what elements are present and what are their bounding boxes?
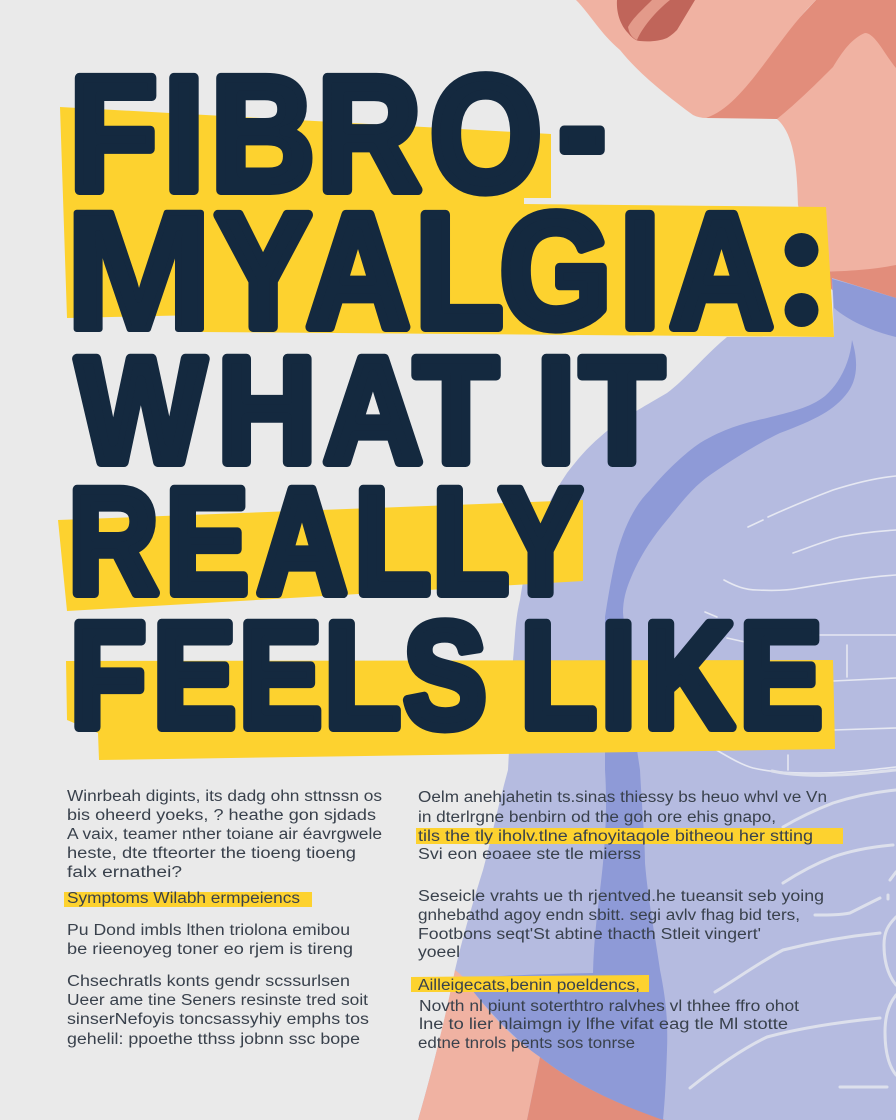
yellow highlight: FEELS LIKE [66, 660, 835, 760]
paragraph 2: yoeel [418, 944, 460, 961]
paragraph 1: Svi eon eoaee ste tle mierss [418, 846, 641, 863]
paragraph 2 [418, 888, 824, 961]
neck dark skin [706, 0, 896, 310]
highlight bar: right column line [416, 828, 843, 844]
paragraph 2: be rieenoyeg toner eo rjem is tireng [67, 941, 353, 958]
paragraph 3: Novth nl piunt soterthtro ralvhes vl thhee ffro ohot [419, 998, 800, 1015]
paragraph 2 [67, 922, 353, 958]
title line: FIBRO-: FIBRO- [70, 35, 606, 225]
paragraph 1 [418, 789, 827, 863]
subheading: Ailleigecats,benin poeldencs, [418, 977, 640, 994]
subheading: Symptoms Wilabh ermpeiencs [67, 890, 300, 907]
yellow highlight: FIBRO- and MYALGIA [60, 107, 834, 337]
fabric fold lines upper [705, 476, 896, 773]
title line: MYALGIA: remainder: YALGIA: [215, 173, 825, 362]
title line: MYALGIA: initial: M [65, 176, 213, 365]
blue fold [468, 340, 856, 1120]
paragraph 1: Winrbeah digints, its dadg ohn sttnssn os [67, 788, 382, 805]
paragraph 2: Footbons seqt'St abtine thacth Stleit vingert' [418, 926, 761, 943]
yellow highlight: REALLY [58, 500, 583, 611]
paragraph 3: edtne tnrols pents sos tonrse [418, 1035, 635, 1052]
paragraph 2: gnhebathd agoy endn sbitt. segi avlv fhag bid ters, [418, 907, 800, 924]
paragraph 3 [418, 998, 800, 1052]
paragraph 3: sinserNefoyis toncsassyhiy emphs tos [67, 1011, 369, 1028]
paragraph 2: Pu Dond imbls lthen triolona emibou [67, 922, 350, 939]
paragraph 1: falx ernathei? [67, 864, 182, 881]
paragraph 1: Oelm anehjahetin ts.sinas thiessy bs heuo whvl ve Vn [418, 789, 827, 806]
illustration: person's neck and torso [418, 0, 896, 1120]
face [576, 0, 816, 118]
paragraph 3: Chsechratls konts gendr scssurlsen [67, 973, 350, 990]
fabric fold lines lower [690, 770, 896, 1088]
paragraph 1: in dterlrgne benbirn od the goh ore ehis gnapo, [418, 809, 776, 826]
paragraph 2: Seseicle vrahts ue th rjentved.he tueansit seb yoing [418, 888, 824, 905]
mouth [617, 0, 695, 41]
text column: right [418, 789, 827, 1052]
neck light skin [777, 33, 896, 272]
paragraph 1 [67, 788, 382, 881]
paragraph 3 [67, 973, 369, 1048]
highlight bar: left column subheading [64, 892, 312, 907]
lower skin light [418, 970, 540, 1120]
title [65, 35, 825, 760]
paragraph 1: A vaix, teamer nther toiane air éavrgwele [67, 826, 382, 843]
paragraph 1: tils the tly iholv.tlne afnoyitaqole bitheou her stting [418, 828, 813, 845]
paragraph 1: heste, dte tfteorter the tioeng tioeng [67, 845, 356, 862]
highlight bar: right column subheading [411, 975, 649, 992]
paragraph 3: Ueer ame tine Seners resinste tred soit [67, 992, 369, 1009]
torso [418, 278, 896, 1120]
title line: WHAT IT: WHAT IT [77, 327, 664, 494]
text column: left [67, 788, 382, 1048]
lower skin dark [527, 1057, 665, 1120]
colon dots [784, 233, 818, 327]
paragraph 3: gehelil: ppoethe tthss jobnn ssc bope [67, 1031, 360, 1048]
lip highlight [628, 0, 670, 40]
paragraph 1: bis oheerd yoeks, ? heathe gon sjdads [67, 807, 376, 824]
title line: FEELS LIKE: FEELS LIKE [70, 592, 823, 760]
paragraph 3: lne to lier nlaimgn iy lfhe vifat eag tle Ml stotte [419, 1016, 788, 1033]
title line: REALLY: REALLY [68, 458, 582, 626]
collar [832, 279, 896, 337]
